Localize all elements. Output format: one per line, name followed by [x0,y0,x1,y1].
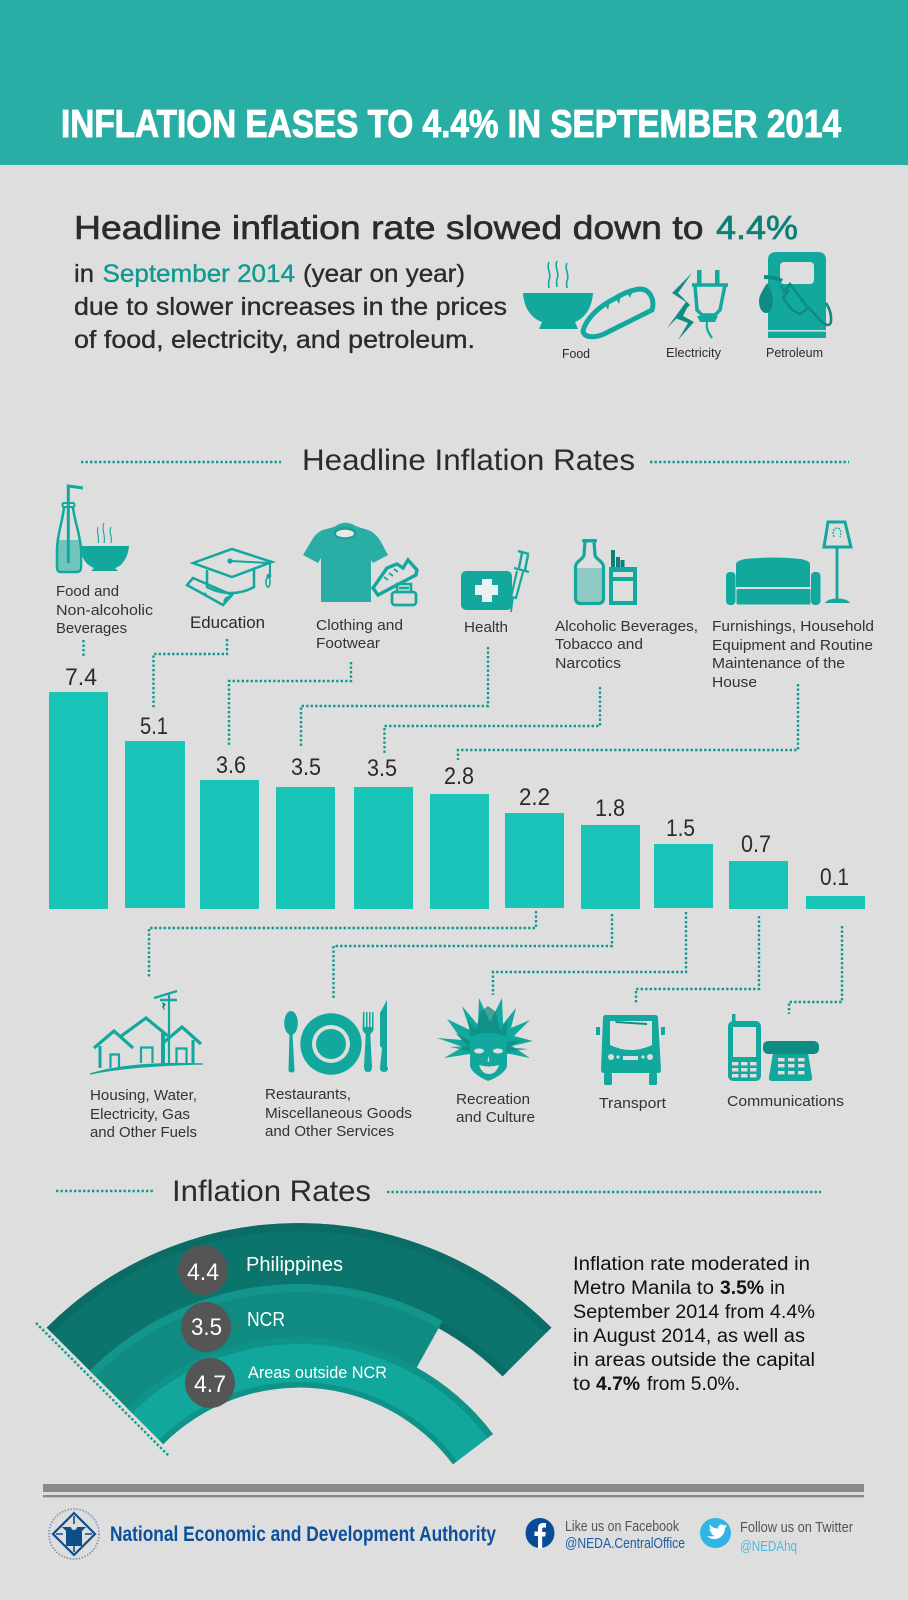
bar chart: 0.1 [820,864,849,891]
arc: ncr [90,1284,442,1417]
label: housing: Electricity, Gas [90,1106,190,1123]
label: food and non-alcoholic beverages [56,583,154,637]
icon: bottle and cigarettes [555,539,698,672]
label: transport: Transport [599,1095,667,1112]
bar chart: 3.5 [291,754,321,781]
explanatory paragraph [573,1254,815,1395]
label: health: Health [464,619,508,636]
label: furnishings: Equipment and Routine [712,637,873,654]
label: alcoholic beverages, tobacco and narcotics: Alcoholic Beverages, [555,618,698,635]
label: food and non-alcoholic beverages: Non-alcoholic [56,602,154,619]
bar chart: 2.2 [519,784,550,811]
label: restaurants: and Other Services [265,1123,394,1140]
intro text block: due to slower increases in the prices [74,293,507,321]
value badge: philippines [178,1245,228,1295]
intro text block: in [74,260,94,288]
explanatory paragraph: in August 2014, as well as [573,1326,805,1347]
value badge: ncr [181,1302,231,1352]
icon: food bowl and bread [523,261,653,361]
label: education: Education [190,613,265,632]
label: furnishings: Furnishings, Household [712,618,874,635]
icon: houses and antenna [90,991,203,1141]
footer rules [43,1484,864,1498]
icon: petrol pump [759,252,831,360]
label: electricity: Electricity [666,345,721,360]
label: alcoholic beverages, tobacco and narcotics [555,618,698,672]
bar chart: 1.5 [666,815,695,842]
arc: philippines [47,1223,551,1376]
label: clothing and footwear [316,617,403,652]
label: food and non-alcoholic beverages: Beverages [56,620,127,637]
label: recreation and culture [456,1091,535,1126]
twitter contact: Follow us on Twitter [740,1520,853,1536]
value badge: philippines: 4.4 [187,1259,219,1286]
label: clothing and footwear: Footwear [316,635,380,652]
label: restaurants: Miscellaneous Goods [265,1105,412,1122]
explanatory paragraph: 4.7% [596,1374,640,1395]
explanatory paragraph: Inflation rate moderated in [573,1254,810,1275]
heading: inflation rates: Inflation Rates [172,1175,371,1208]
explanatory paragraph: in areas outside the capital [573,1350,815,1371]
label: housing [90,1087,197,1141]
label: food: Food [562,346,590,361]
icon: t-shirt and sneakers [303,523,417,652]
explanatory paragraph: from 5.0%. [647,1374,740,1395]
label: recreation and culture: Recreation [456,1091,530,1108]
icon: graduation cap and scroll [187,549,272,632]
intro text block: (year on year) [303,260,465,288]
twitter contact [700,1518,853,1555]
label: clothing and footwear: Clothing and [316,617,403,634]
icon: medical kit and syringe [461,551,529,636]
arc chart: inflation rates by region: Philippines [246,1254,343,1276]
intro text block [74,209,798,354]
bar chart: 2.8 [444,763,474,790]
label: recreation and culture: and Culture [456,1109,535,1126]
bar chart: 7.4 [65,664,97,691]
bar chart: 3.5 [367,755,397,782]
icon: mobile and desk phone [727,1014,844,1110]
icon: bus [596,1015,667,1112]
intro text block: Headline inflation rate slowed down to [74,209,703,246]
bar chart [49,664,865,909]
heading: headline inflation rates: Headline Inflation Rates [302,444,635,477]
explanatory paragraph: Metro Manila to [573,1278,714,1299]
connector lines [84,639,842,1014]
icon: electricity plug [666,270,728,360]
icon: festival mask [437,998,535,1126]
bar chart: 0.7 [741,831,771,858]
label: housing: and Other Fuels [90,1124,197,1141]
explanatory paragraph: in [770,1278,785,1299]
bar chart: 1.8 [595,795,625,822]
label: restaurants [265,1086,412,1140]
value badge: ncr: 3.5 [191,1314,222,1341]
facebook contact: @NEDA.CentralOffice [565,1536,685,1552]
twitter contact: @NEDAhq [740,1539,797,1555]
value badge: areas outside ncr: 4.7 [194,1371,226,1398]
arc chart: inflation rates by region: Areas outside NCR [248,1364,387,1382]
label: furnishings [712,618,874,691]
facebook contact [526,1518,685,1552]
icon: sofa and lamp [712,522,874,691]
arc: areas outside ncr [127,1337,493,1464]
label: furnishings: House [712,674,757,691]
explanatory paragraph: September 2014 from 4.4% [573,1302,815,1323]
label: housing: Housing, Water, [90,1087,197,1104]
bar chart: 5.1 [140,713,168,740]
explanatory paragraph: 3.5% [720,1278,764,1299]
label: alcoholic beverages, tobacco and narcotics: Narcotics [555,655,621,672]
label: petroleum: Petroleum [766,345,823,360]
label: food and non-alcoholic beverages: Food and [56,583,119,600]
icon: plate and cutlery [265,1000,412,1140]
arc chart: inflation rates by region [36,1223,551,1464]
icon: bottle and bowl [56,486,154,637]
facebook contact: Like us on Facebook [565,1519,680,1535]
label: communications: Communications [727,1093,844,1110]
header banner [0,0,908,165]
value badge: areas outside ncr [185,1358,235,1408]
icon: NEDA logo [49,1509,99,1559]
bar chart: 3.6 [216,752,246,779]
label: furnishings: Maintenance of the [712,655,845,672]
label: restaurants: Restaurants, [265,1086,351,1103]
intro text block: September 2014 [102,260,295,288]
label: alcoholic beverages, tobacco and narcotics: Tobacco and [555,636,643,653]
intro text block: of food, electricity, and petroleum. [74,326,475,354]
arc chart: inflation rates by region: NCR [247,1309,285,1331]
intro text block: 4.4% [716,209,798,246]
explanatory paragraph: to [573,1374,590,1395]
organisation name: National Economic and Development Authority [110,1523,496,1546]
